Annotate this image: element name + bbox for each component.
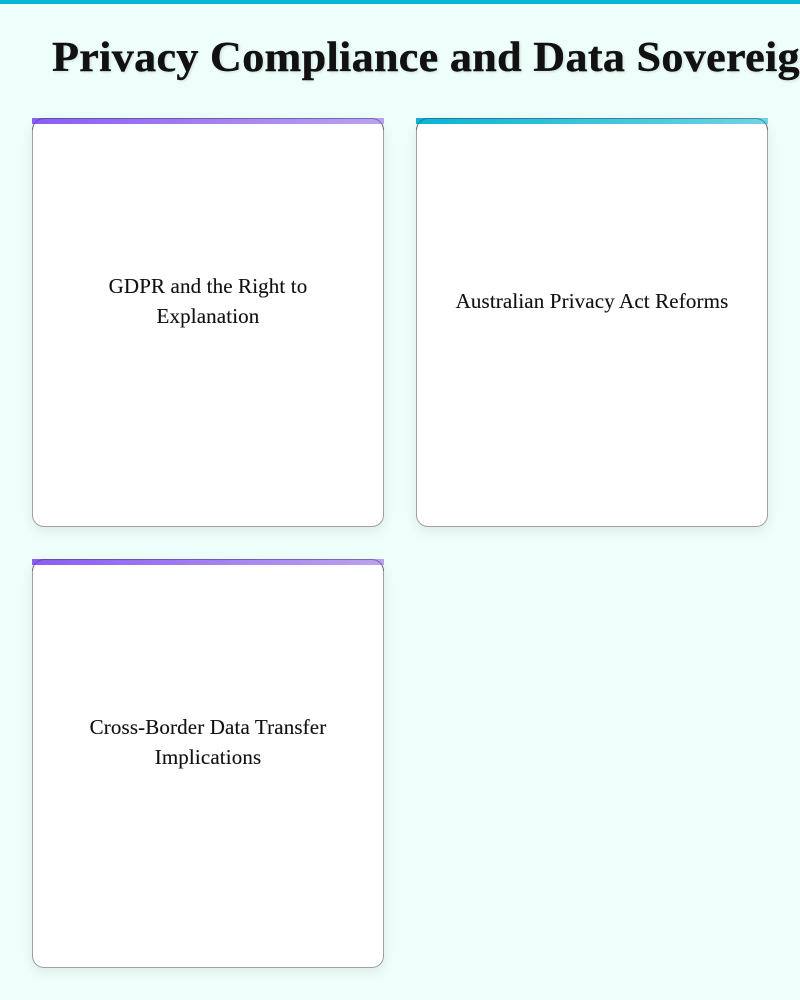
top accent bar [0,0,800,4]
card heading: GDPR [109,274,307,328]
card accent bar: cyan [416,118,768,124]
panel: Australian Privacy Act Reforms [416,118,768,527]
card heading: Cross-Border: Cross-Border Data Transfer [90,715,326,739]
card heading: Cross-Border [90,715,326,769]
panel: GDPR and the Right to Explanation [32,118,384,527]
card heading: GDPR: GDPR and the Right to [109,274,307,298]
card accent bar: violet [32,118,384,124]
card heading: Australian Privacy Act: Australian Privacy Act Reforms [456,289,728,313]
card accent bar: violet [32,559,384,565]
card heading: Cross-Border: Implications [155,745,261,769]
card heading: GDPR: Explanation [157,304,259,328]
panel: Cross-Border Data Transfer Implications [32,559,384,968]
